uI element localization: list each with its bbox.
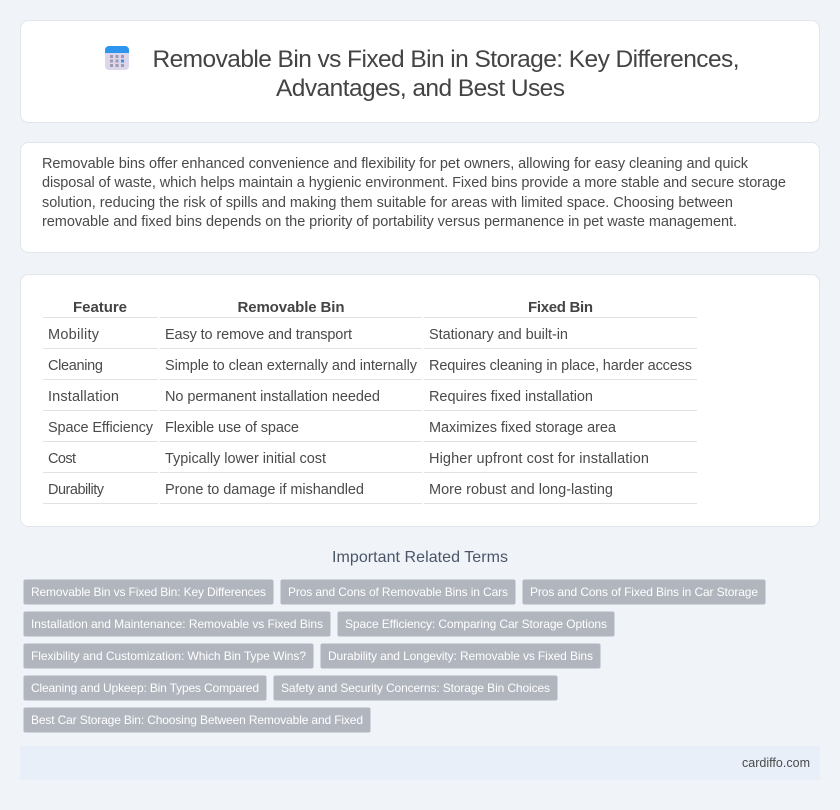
row: installation: No permanent installation needed: [165, 389, 380, 405]
row: durability: Prone to damage if mishandled: [165, 482, 364, 498]
row: mobility: [48, 327, 568, 343]
related terms tags: [24, 580, 766, 732]
row: mobility: Easy to remove and transport: [165, 327, 352, 343]
row: cleaning: Requires cleaning in place, harder access: [429, 358, 692, 374]
panel: intro text: removable and fixed bins depends on the priority of portability versus permanence in pet waste management.: [42, 214, 737, 230]
row: space efficiency: Maximizes fixed storage area: [429, 420, 617, 436]
tag: [320, 644, 600, 668]
tag: Flexibility and Customization: Which Bin Type Wins?: [31, 649, 306, 663]
tag: [24, 612, 330, 636]
row: installation: Installation: [48, 389, 119, 405]
row: cleaning: Simple to clean externally and internally: [165, 358, 418, 374]
tag: Pros and Cons of Removable Bins in Cars: [288, 585, 508, 599]
table header: Fixed Bin: [528, 299, 593, 316]
row: installation: [48, 389, 593, 405]
title: [152, 46, 740, 102]
title: Advantages, and Best Uses: [276, 75, 565, 102]
tag: [280, 580, 516, 604]
row: space efficiency: Space Efficiency: [48, 420, 154, 436]
row: cleaning: Cleaning: [48, 358, 103, 374]
tag: Installation and Maintenance: Removable vs Fixed Bins: [31, 617, 323, 631]
row: mobility: Mobility: [48, 327, 100, 343]
row: cost: [48, 451, 649, 467]
panel: comparison table: [20, 274, 820, 526]
table header: Feature: [73, 299, 127, 316]
icon: calendar: [105, 46, 129, 70]
tag: Pros and Cons of Fixed Bins in Car Storage: [530, 585, 758, 599]
footer: cardiffo.com: [742, 756, 810, 770]
row: durability: Durability: [48, 482, 105, 498]
row: installation: Requires fixed installation: [429, 389, 593, 405]
tag: Removable Bin vs Fixed Bin: Key Differences: [31, 585, 266, 599]
row: durability: More robust and long-lasting: [429, 482, 613, 498]
tag: Best Car Storage Bin: Choosing Between Removable and Fixed: [31, 713, 363, 727]
footer: [20, 746, 820, 780]
table header: [73, 299, 593, 316]
tag: [24, 676, 266, 700]
panel: intro text: [20, 142, 820, 252]
tag: Safety and Security Concerns: Storage Bin Choices: [281, 681, 550, 695]
tag: [274, 676, 558, 700]
table header: Removable Bin: [238, 299, 344, 316]
panel: intro text: disposal of waste, which helps maintain a hygienic environment. Fixed bins provide a more stable and secure storage: [42, 175, 786, 191]
title: Removable Bin vs Fixed Bin in Storage: Key Differences,: [152, 46, 740, 73]
row: mobility: Stationary and built-in: [429, 327, 568, 343]
row: cost: Cost: [48, 451, 76, 467]
row: cost: Typically lower initial cost: [165, 451, 326, 467]
row: space efficiency: [48, 420, 617, 436]
tag: Space Efficiency: Comparing Car Storage Options: [345, 617, 607, 631]
panel: intro text: solution, reducing the risk of spills and making them suitable for areas with limited space. Choosing between: [42, 195, 733, 211]
panel: intro text: Removable bins offer enhanced convenience and flexibility for pet owners, allowing for easy cleaning and quick: [42, 156, 749, 172]
tag: Durability and Longevity: Removable vs Fixed Bins: [328, 649, 593, 663]
row: space efficiency: Flexible use of space: [165, 420, 299, 436]
tag: [24, 708, 370, 732]
header panel: [20, 20, 820, 122]
tag: [24, 644, 314, 668]
row: cleaning: [48, 358, 692, 374]
row: durability: [48, 482, 613, 498]
tag: Cleaning and Upkeep: Bin Types Compared: [31, 681, 259, 695]
heading: important related terms: Important Related Terms: [332, 549, 508, 566]
tag: [24, 580, 274, 604]
tag: [338, 612, 614, 636]
tag: [522, 580, 766, 604]
row: cost: Higher upfront cost for installation: [429, 451, 649, 467]
